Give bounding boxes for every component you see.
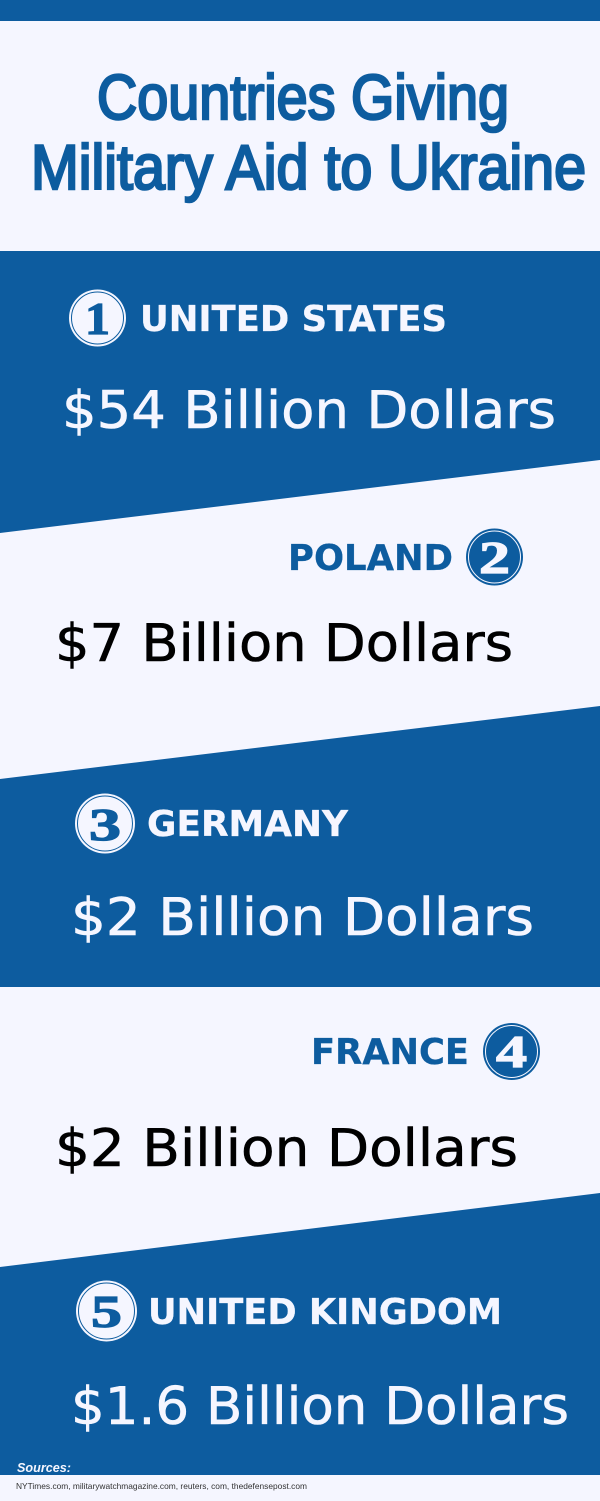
amount: $7 Billion Dollars	[55, 614, 513, 674]
amount: $2 Billion Dollars	[55, 1119, 518, 1179]
country name: POLAND	[288, 538, 453, 579]
panel: France	[55, 1023, 540, 1179]
icon: rank 5	[76, 1280, 137, 1342]
icon: rank 3	[75, 794, 135, 854]
sources heading: Sources:	[17, 1461, 71, 1475]
amount: $1.6 Billion Dollars	[71, 1377, 569, 1437]
icon: rank 3: 3	[89, 799, 121, 850]
icon: rank 4	[483, 1023, 540, 1080]
icon: rank 1: 1	[85, 293, 110, 344]
title	[31, 63, 586, 203]
top band	[0, 0, 600, 21]
icon: rank 4: 4	[496, 1026, 527, 1077]
country name: GERMANY	[147, 804, 349, 845]
country name: FRANCE	[311, 1032, 469, 1073]
amount: $54 Billion Dollars	[62, 381, 556, 441]
panel: United Kingdom	[0, 1193, 600, 1475]
country name: UNITED STATES	[140, 299, 447, 340]
icon: rank 5: 5	[91, 1286, 122, 1337]
panel: United States	[0, 251, 600, 533]
icon: rank 1	[69, 290, 126, 346]
sources list: NYTimes.com, militarywatchmagazine.com, reuters, com, thedefensepost.com	[16, 1481, 307, 1491]
icon: rank 2	[466, 528, 523, 586]
title: Countries Giving	[97, 63, 509, 133]
panel: Poland	[55, 528, 523, 674]
icon: rank 2: 2	[479, 532, 510, 583]
country name: UNITED KINGDOM	[148, 1292, 502, 1333]
amount: $2 Billion Dollars	[71, 888, 534, 948]
panel: Germany	[0, 706, 600, 987]
